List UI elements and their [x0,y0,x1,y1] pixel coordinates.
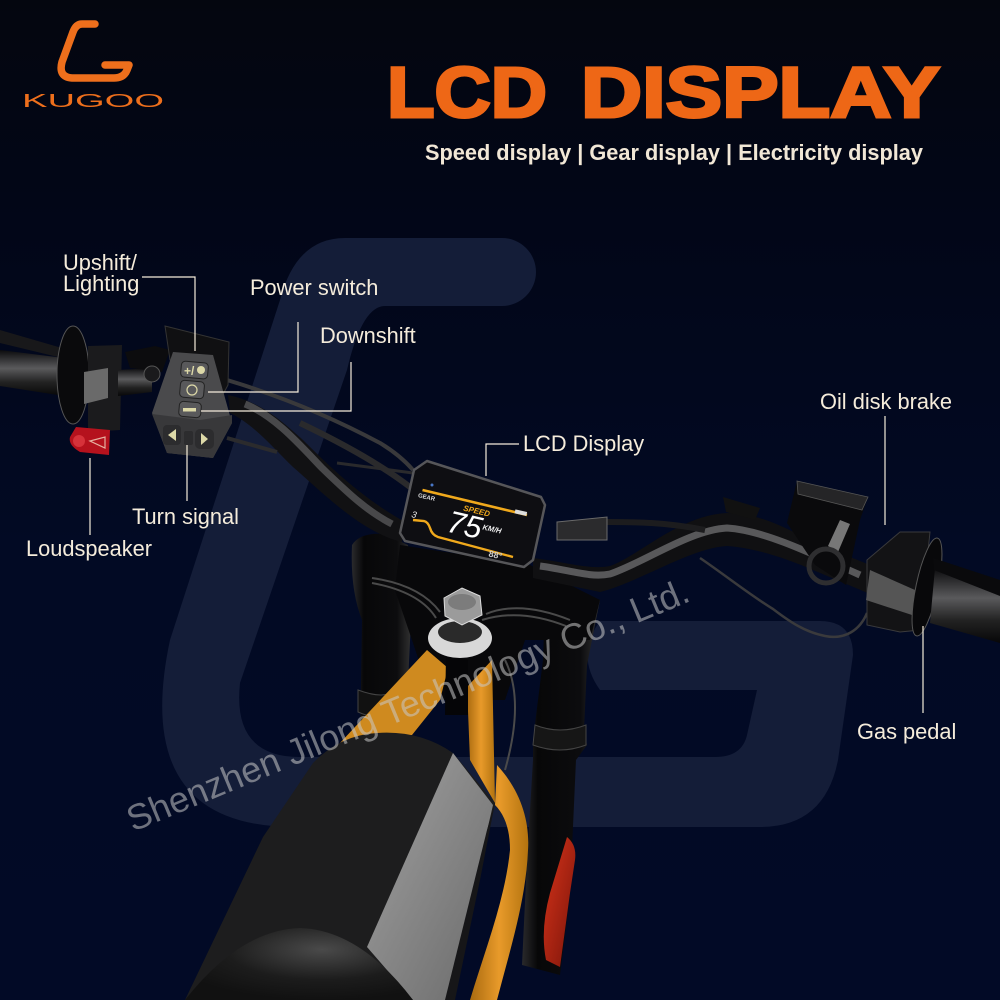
watermark text: Shenzhen Jilong Technology Co., Ltd. [120,570,695,839]
callout: LCD Display [486,431,644,476]
coil spring [557,517,607,540]
title: DISPLAY [581,54,940,133]
control pod [152,352,232,458]
logo: Kugoo [22,24,164,111]
right handlebar tube [533,513,870,637]
brake reservoir behind control pod [165,326,229,400]
callout: LCD Display: LCD Display [523,431,644,456]
callout: Power switch: Power switch [250,275,378,300]
red reflector [544,837,575,967]
LCD display: SPEED [462,504,491,519]
callout: Gas pedal: Gas pedal [857,719,956,744]
callout: Loudspeaker: Loudspeaker [26,536,152,561]
control pod: +/ [184,364,195,378]
LCD display: 75 [444,504,486,546]
callout: Upshift / Lighting [63,250,195,351]
callout: Oil disk brake: Oil disk brake [820,389,952,414]
callout: Oil disk brake [820,389,952,525]
LCD display: GEAR [417,493,436,503]
callout: Turn signal [132,445,239,529]
rear wheel [185,928,413,1000]
LCD display: KM/H [482,523,503,536]
battery cover / mudguard [185,733,495,1000]
left grip, disc and housing [0,326,170,432]
front fork: right leg [522,600,600,975]
cable loops at stem [372,578,570,770]
LCD display: 88° [488,549,504,561]
title: LCD [387,54,547,133]
callout: Downshift: Downshift [320,323,416,348]
orange frame tubes [340,650,528,1000]
LCD display: 3 [411,509,418,520]
watermark: large G logo [162,238,853,827]
subtitle: Speed display | Gear display | Electricity display [425,140,924,165]
stem dark mass [395,545,600,700]
callout: Upshift / Lighting: Upshift/ [63,250,138,275]
callout: Power switch [208,275,378,392]
callout: Turn signal: Turn signal [132,504,239,529]
left handlebar tube [227,380,413,542]
LCD display [400,461,545,567]
stem bolt and collar [428,588,492,658]
callout: Loudspeaker [26,458,152,561]
logo: Kugoo: KUGOO [22,91,164,111]
title [387,54,940,133]
right throttle housing and grip [866,532,1000,643]
front fork: left leg [352,534,412,745]
callout: Downshift [201,323,416,411]
callout: Gas pedal [857,626,956,744]
horn button [70,427,110,455]
right brake master and lever [723,481,868,585]
callout: Upshift / Lighting: Lighting [63,271,139,296]
